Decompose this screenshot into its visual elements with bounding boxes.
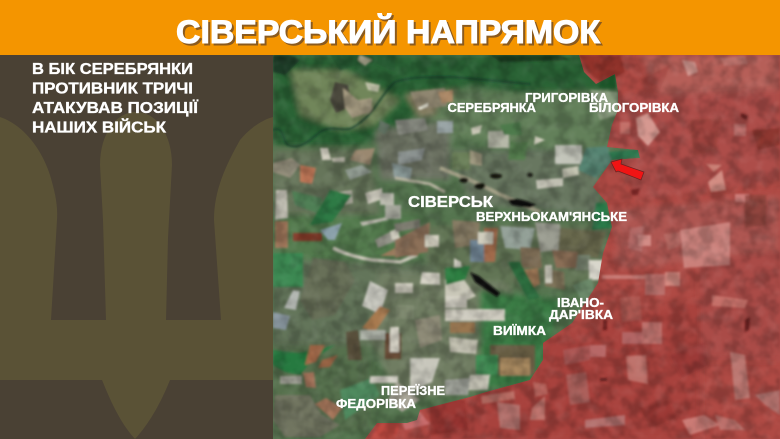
panel text: ПРОТИВНИК ТРИЧІ xyxy=(32,80,193,98)
mottled texture xyxy=(273,55,780,439)
panel text: АТАКУВАВ ПОЗИЦІЇ xyxy=(32,99,199,117)
place labels: ПЕРЕЇЗНЕ xyxy=(381,383,445,398)
title: СІВЕРСЬКИЙ НАПРЯМОК xyxy=(178,16,602,52)
forest detail xyxy=(273,55,300,75)
map panel xyxy=(273,55,780,439)
white road west xyxy=(333,248,417,262)
icon: trident emblem xyxy=(0,112,273,439)
place labels: СЕРЕБРЯНКА xyxy=(448,100,537,115)
place labels: ФЕДОРІВКА xyxy=(336,396,417,411)
place labels xyxy=(336,90,680,411)
occupied red zone xyxy=(360,55,780,439)
place labels: СІВЕРСЬК xyxy=(408,194,493,211)
place labels: ВИЇМКА xyxy=(493,323,547,338)
place labels: ВЕРХНЬОКАМ'ЯНСЬКЕ xyxy=(476,209,627,224)
place labels: БІЛОГОРІВКА xyxy=(589,100,680,115)
place labels: ДАР'ІВКА xyxy=(549,307,614,322)
place labels: ГРИГОРІВКА xyxy=(525,90,609,105)
panel text: В БІК СЕРЕБРЯНКИ xyxy=(32,61,193,78)
centre fields xyxy=(395,222,430,258)
satellite base xyxy=(273,55,640,439)
left panel xyxy=(0,55,273,439)
place labels: ІВАНО- xyxy=(557,295,604,310)
panel text xyxy=(32,61,199,136)
lakes xyxy=(460,177,468,183)
title: СІВЕРСЬКИЙ НАПРЯМОК xyxy=(176,14,600,50)
arrow xyxy=(611,159,644,180)
header bar xyxy=(0,0,780,55)
panel text: НАШИХ ВІЙСЬК xyxy=(32,118,166,136)
